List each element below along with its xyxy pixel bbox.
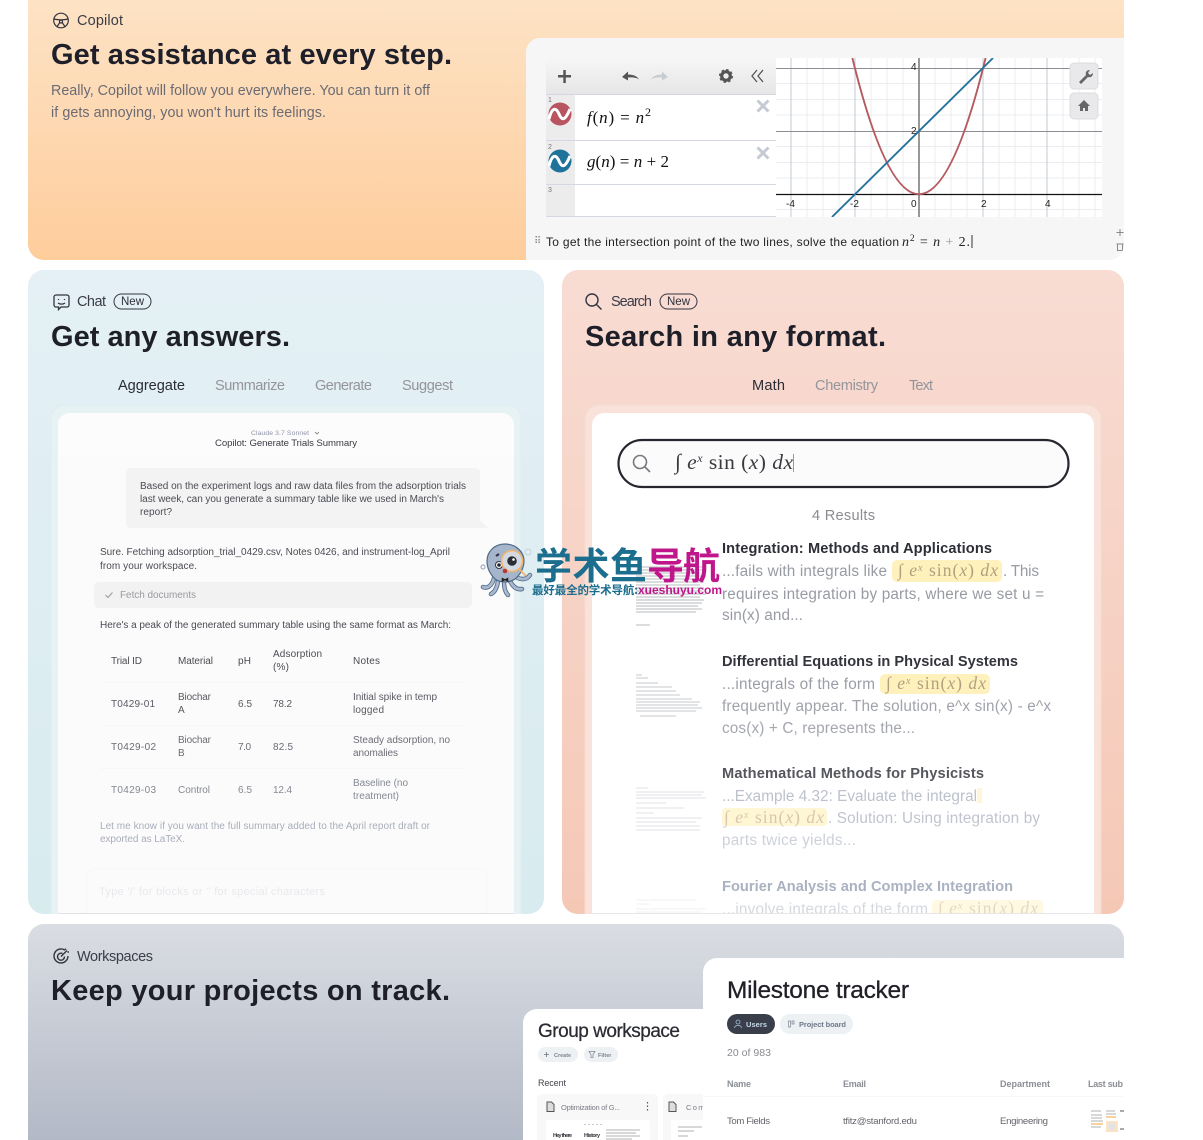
badge: New	[660, 294, 697, 309]
user message bubble	[140, 482, 466, 517]
closing message: exported as LaTeX.	[100, 834, 185, 845]
graph	[775, 58, 1102, 217]
row numbers: 3	[548, 187, 552, 194]
text: equation instruction: ⠿	[534, 236, 541, 247]
result 3: . Solution: Using integration by	[828, 810, 1040, 827]
result 2: sin(	[912, 673, 946, 693]
row numbers	[548, 97, 552, 194]
row numbers: 2	[548, 144, 552, 151]
thumbnail: result 2	[636, 675, 702, 716]
icon: red function	[548, 102, 572, 126]
toolbar icons	[558, 70, 763, 83]
closing message: Let me know if you want the full summary added to the April report draft or	[100, 821, 431, 832]
tabs: chat modes: Summarize	[215, 378, 285, 394]
table: trials summary: Trial ID	[111, 656, 142, 667]
result 1: x	[917, 563, 923, 574]
text: equation instruction: n	[902, 235, 909, 250]
result 2: Differential Equations in Physical Systems	[722, 654, 1018, 670]
table: trials summary: Steady adsorption, no	[353, 735, 450, 746]
algebra panel	[546, 58, 776, 217]
card: graph and equation editor	[526, 38, 1124, 260]
result 3: ...Example 4.32: Evaluate the integral	[722, 788, 977, 805]
text: equation instruction: n + 2.	[933, 235, 970, 250]
assistant reply: Sure. Fetching adsorption_trial_0429.csv, Notes 0426, and instrument-log_April	[100, 547, 450, 558]
table: trials summary: Control	[178, 785, 210, 796]
button: create	[538, 1047, 578, 1062]
result 1: Integration: Methods and Applications	[722, 541, 992, 557]
text: equation instruction: =	[916, 235, 932, 250]
badge: New	[114, 294, 151, 309]
closing message	[100, 821, 431, 845]
result 4: x	[957, 901, 963, 912]
model selector: Claude 3.7 Sonnet	[251, 430, 309, 437]
model selector	[251, 430, 320, 435]
table: users: Department	[1000, 1079, 1050, 1089]
logo tagline: xueshuyu.com	[638, 583, 722, 597]
axis labels: 0	[911, 199, 917, 210]
card: group workspace	[523, 1009, 743, 1140]
tabs: search formats: Text	[909, 378, 933, 394]
table: users: Email	[843, 1079, 866, 1089]
icon: blue function	[548, 150, 572, 172]
result 2: ...integrals of the form	[722, 676, 875, 693]
result 1: x) dx	[959, 560, 998, 580]
table: trials summary: (%)	[273, 662, 289, 673]
conversation title: Copilot: Generate Trials Summary	[215, 438, 357, 449]
result 4: sin(	[964, 898, 998, 918]
table: trials summary: B	[178, 748, 185, 759]
result 4: ∫ e	[937, 898, 957, 919]
table intro: Here's a peak of the generated summary table using the same format as March:	[100, 620, 451, 631]
document card 1: Hey there	[553, 1133, 572, 1139]
tabs: chat modes: Aggregate	[118, 378, 185, 394]
result 2: frequently appear. The solution, e^x sin(x) - e^x	[722, 698, 1051, 715]
table: trials summary: Notes	[353, 656, 380, 667]
table: trials summary: pH	[238, 656, 251, 667]
result 2: ∫ e	[885, 673, 905, 694]
tabs: search formats: Math	[752, 378, 785, 394]
document card 2	[663, 1094, 743, 1140]
axis labels: -4	[786, 199, 795, 210]
tabs: search formats: Chemistry	[815, 378, 879, 394]
icon: steering wheel	[54, 13, 68, 28]
table: users: Last sub	[1088, 1079, 1124, 1089]
table: trials summary: logged	[353, 705, 384, 716]
button: create: Create	[554, 1053, 571, 1059]
tabs: chat modes: Generate	[315, 378, 372, 394]
result 3: ∫ e	[723, 807, 743, 828]
button: users: Users	[746, 1020, 767, 1029]
label: Workspaces: Workspaces	[77, 949, 153, 965]
heading: search: Search in any format.	[585, 321, 886, 353]
table: users: Engineering	[1000, 1116, 1048, 1127]
result 3: Mathematical Methods for Physicists	[722, 766, 984, 782]
table: trials summary	[100, 649, 467, 802]
fetch documents step: Fetch documents	[120, 590, 196, 601]
result 3: x	[743, 810, 749, 821]
table: trials summary: T0429-01	[111, 699, 155, 710]
panel: chat	[28, 270, 544, 935]
equation f: 2	[645, 105, 651, 119]
icon: chat bubble	[54, 295, 69, 310]
button: home	[1070, 93, 1098, 119]
assistant reply	[100, 547, 450, 572]
card: milestone tracker	[703, 958, 1124, 1140]
search box: x	[696, 451, 703, 465]
milestone title: Milestone tracker	[727, 977, 909, 1004]
table: trials summary: 6.5	[238, 785, 252, 796]
icon: magnifier	[586, 294, 602, 310]
result 3: sin(	[750, 807, 784, 827]
label: Recent: Recent	[538, 1078, 566, 1088]
table: users: Name	[727, 1079, 751, 1089]
result 2: x	[905, 676, 911, 687]
results count: 4 Results	[812, 508, 875, 524]
logo text: 学术鱼	[535, 536, 647, 590]
search box: x) dx	[749, 450, 793, 474]
user message bubble: report?	[140, 507, 172, 518]
result 3: parts twice yields...	[722, 832, 856, 849]
message input: Type '/' for blocks or '' for special characters	[99, 886, 326, 898]
row numbers: 1	[548, 97, 552, 104]
axis labels: 4	[911, 62, 917, 73]
table: trials summary: Biochar	[178, 735, 212, 746]
text: copilot description: if gets annoying, you won't hurt its feelings.	[51, 105, 326, 121]
table: trials summary: Biochar	[178, 692, 212, 703]
axis labels: -2	[850, 199, 859, 210]
result 4	[636, 879, 1043, 920]
user message bubble: Based on the experiment logs and raw data files from the adsorption trials	[140, 481, 466, 492]
table: trials summary: T0429-02	[111, 742, 156, 753]
label: Search: Search	[611, 294, 652, 310]
parabola curve	[852, 58, 986, 194]
tabs: search formats	[752, 378, 933, 394]
result 1	[722, 541, 1044, 624]
search box	[618, 440, 1068, 487]
icon: target	[54, 948, 69, 963]
document card 2: Comp	[686, 1103, 710, 1112]
straight line	[832, 58, 993, 217]
text: equation instruction: 2	[910, 234, 915, 244]
result 3: x) dx	[785, 807, 824, 827]
tabs: chat modes: Suggest	[402, 378, 453, 394]
table: trials summary: Baseline (no	[353, 778, 408, 789]
table: trials summary: 82.5	[273, 742, 293, 753]
panel: search	[562, 270, 1124, 935]
table: trials summary: Initial spike in temp	[353, 692, 437, 703]
logo tagline: 最好最全的学术导航:	[532, 582, 638, 598]
result 4: Fourier Analysis and Complex Integration	[722, 879, 1013, 895]
thumbnail: last submission	[1091, 1111, 1124, 1132]
label: Chat: Chat	[77, 294, 106, 310]
table: trials summary: 7.0	[238, 742, 251, 753]
panel: copilot	[28, 0, 1124, 260]
icon: octopus mascot	[481, 544, 531, 595]
text: equation instruction: To get the intersection point of the two lines, solve the equation	[546, 235, 899, 249]
search box: ∫ e	[673, 450, 697, 475]
table: trials summary: treatment)	[353, 791, 399, 802]
text: copilot description	[51, 83, 430, 121]
heading: copilot: Get assistance at every step.	[51, 39, 452, 71]
user message bubble: last week, can you generate a summary table like we used in March's	[140, 494, 444, 505]
document card 1: Optimization of G...	[561, 1103, 620, 1112]
thumbnail: result 3	[636, 788, 706, 830]
button: filter	[584, 1047, 618, 1062]
result 1: sin(	[924, 560, 958, 580]
logo tagline	[532, 582, 722, 598]
axis labels	[786, 62, 1051, 210]
logo text: 导航	[647, 536, 720, 590]
result 4: x) dx	[999, 898, 1038, 918]
badge: New: New	[667, 296, 691, 308]
result 3	[722, 766, 1040, 849]
table: trials summary: Material	[178, 656, 213, 667]
record count: 20 of 983	[727, 1047, 771, 1059]
assistant reply: from your workspace.	[100, 561, 197, 572]
result 1: ∫ e	[897, 560, 917, 581]
heading: chat: Get any answers.	[51, 321, 290, 353]
result 1: ...fails with integrals like	[722, 563, 887, 580]
panel: workspaces	[28, 924, 1124, 1140]
card: chat conversation	[51, 405, 521, 935]
group workspace title: Group workspace	[538, 1021, 680, 1042]
equation f: f(n) = n	[587, 108, 644, 127]
tabs: chat modes	[118, 379, 453, 393]
axis labels: 4	[1045, 199, 1051, 210]
table: trials summary: 12.4	[273, 785, 292, 796]
watermark: xueshuyu logo	[481, 536, 722, 598]
button: users	[727, 1014, 775, 1034]
table: users	[703, 1079, 1124, 1132]
logo text	[535, 536, 720, 590]
table: trials summary: A	[178, 705, 185, 716]
result 2: x) dx	[947, 673, 986, 693]
button: filter: Filter	[598, 1053, 612, 1059]
button: wrench	[1070, 63, 1098, 89]
result 1: requires integration by parts, where we set u =	[722, 586, 1044, 603]
label: Copilot: Copilot	[77, 13, 123, 29]
table: users: Tom Fields	[727, 1116, 770, 1127]
equation g: g(n) = n + 2	[587, 152, 669, 171]
card: search results	[585, 405, 1101, 935]
document card 1	[537, 1094, 658, 1140]
thumbnail: result 1	[636, 567, 706, 625]
result 2: cos(x) + C, represents the...	[722, 720, 915, 737]
axis labels: 2	[911, 126, 917, 137]
document card 1: History	[584, 1133, 601, 1139]
table: trials summary: Adsorption	[273, 649, 322, 660]
heading: workspaces: Keep your projects on track.	[51, 975, 450, 1007]
result 1: . This	[1003, 563, 1039, 580]
text: copilot description: Really, Copilot will follow you everywhere. You can turn it off	[51, 83, 430, 99]
table: trials summary: 6.5	[238, 699, 252, 710]
search box: sin (	[703, 450, 748, 474]
button: project board	[780, 1014, 853, 1034]
result 4: ...involve integrals of the form	[722, 901, 928, 918]
fetch documents step	[94, 582, 472, 608]
badge: New: New	[121, 296, 145, 308]
button: project board: Project board	[799, 1020, 846, 1029]
icon: delete marks	[758, 100, 768, 158]
table: trials summary: anomalies	[353, 748, 398, 759]
result 2	[722, 654, 1051, 737]
icon: add and delete	[1116, 229, 1124, 250]
table: trials summary: T0429-03	[111, 785, 156, 796]
table: users: tfitz@stanford.edu	[843, 1116, 917, 1127]
axis labels: 2	[981, 199, 987, 210]
result 1: sin(x) and...	[722, 607, 803, 624]
table: trials summary: 78.2	[273, 699, 292, 710]
